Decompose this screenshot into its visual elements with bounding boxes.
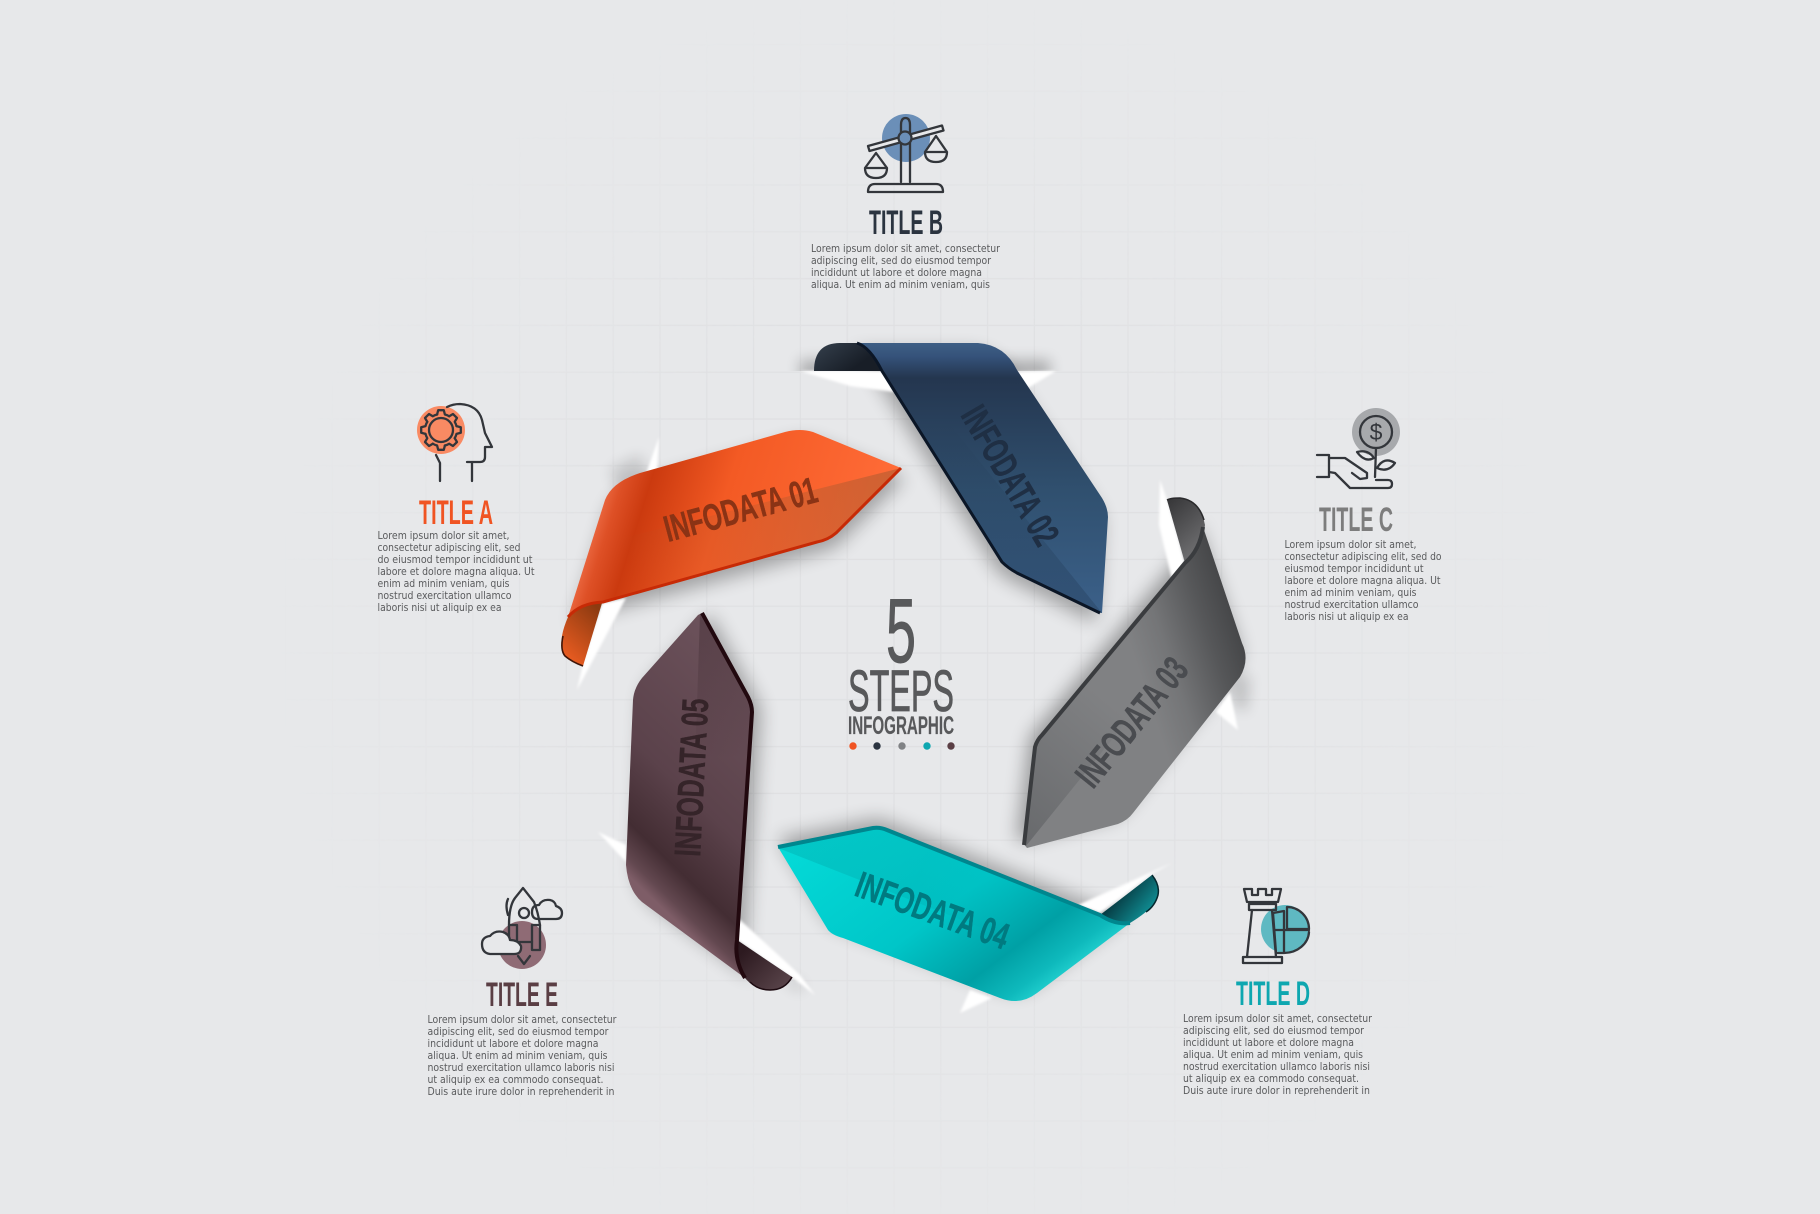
text block: title A [378,530,534,614]
panel: title E [428,888,617,1098]
text block: title B: incididunt ut labore et dolore magna [811,267,982,279]
text block: title E [428,1014,617,1098]
text block: title D: Duis aute irure dolor in reprehenderit in [1183,1085,1370,1097]
text block: title C [1284,539,1442,623]
text block: title C: enim ad minim veniam, quis [1284,587,1416,599]
text block: title D [1183,1013,1373,1097]
text block: title B: aliqua. Ut enim ad minim veniam, quis [811,279,990,291]
text block: title E: adipiscing elit, sed do eiusmod tempor [428,1026,609,1038]
ribbon 01 label: INFODATA 01 [659,469,822,550]
text block: title D: Lorem ipsum dolor sit amet, consectetur [1183,1013,1373,1025]
ribbon 05: plum arrow [598,613,815,995]
text block: title A: consectetur adipiscing elit, sed [378,542,520,554]
icon: rocket and clouds [482,888,562,969]
text block: title D: nostrud exercitation ullamco laboris nisi [1183,1061,1370,1073]
panel: title A [378,404,534,614]
panel: title B [811,114,1001,291]
text block: title B: Lorem ipsum dolor sit amet, consectetur [811,243,1001,255]
text block: title E: Duis aute irure dolor in reprehenderit in [428,1086,614,1098]
icon: head with gear [417,404,492,481]
text block: title A: Lorem ipsum dolor sit amet, [378,530,510,542]
text block: title D: ut aliquip ex ea commodo consequat. [1183,1073,1359,1085]
center heading: 5 steps infographic [848,581,955,750]
text block: title C: laboris nisi ut aliquip ex ea [1284,611,1408,623]
text block: title A: enim ad minim veniam, quis [378,578,510,590]
ribbon 02: navy arrow [800,343,1108,621]
ribbon 05 label: INFODATA 05 [667,697,716,857]
heading: title E: TITLE E [486,976,558,1014]
text block: title A: nostrud exercitation ullamco [378,590,512,602]
text block: title D: aliqua. Ut enim ad minim veniam, quis [1183,1049,1363,1061]
text block: title D: incididunt ut labore et dolore magna [1183,1037,1354,1049]
ribbon 04 label: INFODATA 04 [850,864,1015,957]
center heading: 5 steps infographic: 5 [886,581,916,682]
center heading: 5 steps infographic: STEPS [848,659,954,724]
ribbon 03 label: INFODATA 03 [1067,650,1196,795]
text block: title C: nostrud exercitation ullamco [1284,599,1418,611]
ribbon 02 label: INFODATA 02 [953,398,1067,553]
icon: hand with money plant: $ [1370,419,1383,445]
text block: title D: adipiscing elit, sed do eiusmod tempor [1183,1025,1365,1037]
heading: title A: TITLE A [419,494,493,532]
color dots [849,742,955,750]
icon: scales [865,114,947,192]
ribbon 04: teal arrow [778,819,1172,1013]
text block: title A: labore et dolore magna aliqua. Ut [378,566,534,578]
icon: chess rook and pie chart [1243,889,1309,963]
text block: title C: Lorem ipsum dolor sit amet, [1284,539,1416,551]
heading: title D: TITLE D [1236,975,1310,1013]
text block: title E: Lorem ipsum dolor sit amet, consectetur [428,1014,617,1026]
ribbon 01: orange arrow [561,430,905,690]
text block: title A: laboris nisi ut aliquip ex ea [378,602,502,614]
text block: title C: consectetur adipiscing elit, sed do [1284,551,1442,563]
panel: title C [1284,408,1442,623]
heading: title C: TITLE C [1319,501,1393,539]
text block: title E: ut aliquip ex ea commodo consequat. [428,1074,604,1086]
icon: hand with money plant [1317,408,1400,488]
text block: title A: do eiusmod tempor incididunt ut [378,554,532,566]
ribbon 03: grey arrow [1017,480,1250,848]
heading: title B: TITLE B [869,204,943,242]
text block: title E: aliqua. Ut enim ad minim veniam, quis [428,1050,608,1062]
text block: title C: labore et dolore magna aliqua. Ut [1284,575,1440,587]
text block: title C: eiusmod tempor incididunt ut [1284,563,1424,575]
text block: title E: nostrud exercitation ullamco laboris nisi [428,1062,614,1074]
panel: title D [1183,889,1373,1097]
text block: title E: incididunt ut labore et dolore magna [428,1038,598,1050]
text block: title B: adipiscing elit, sed do eiusmod tempor [811,255,992,267]
text block: title B [811,243,1001,291]
center heading: 5 steps infographic: INFOGRAPHIC [848,712,954,740]
